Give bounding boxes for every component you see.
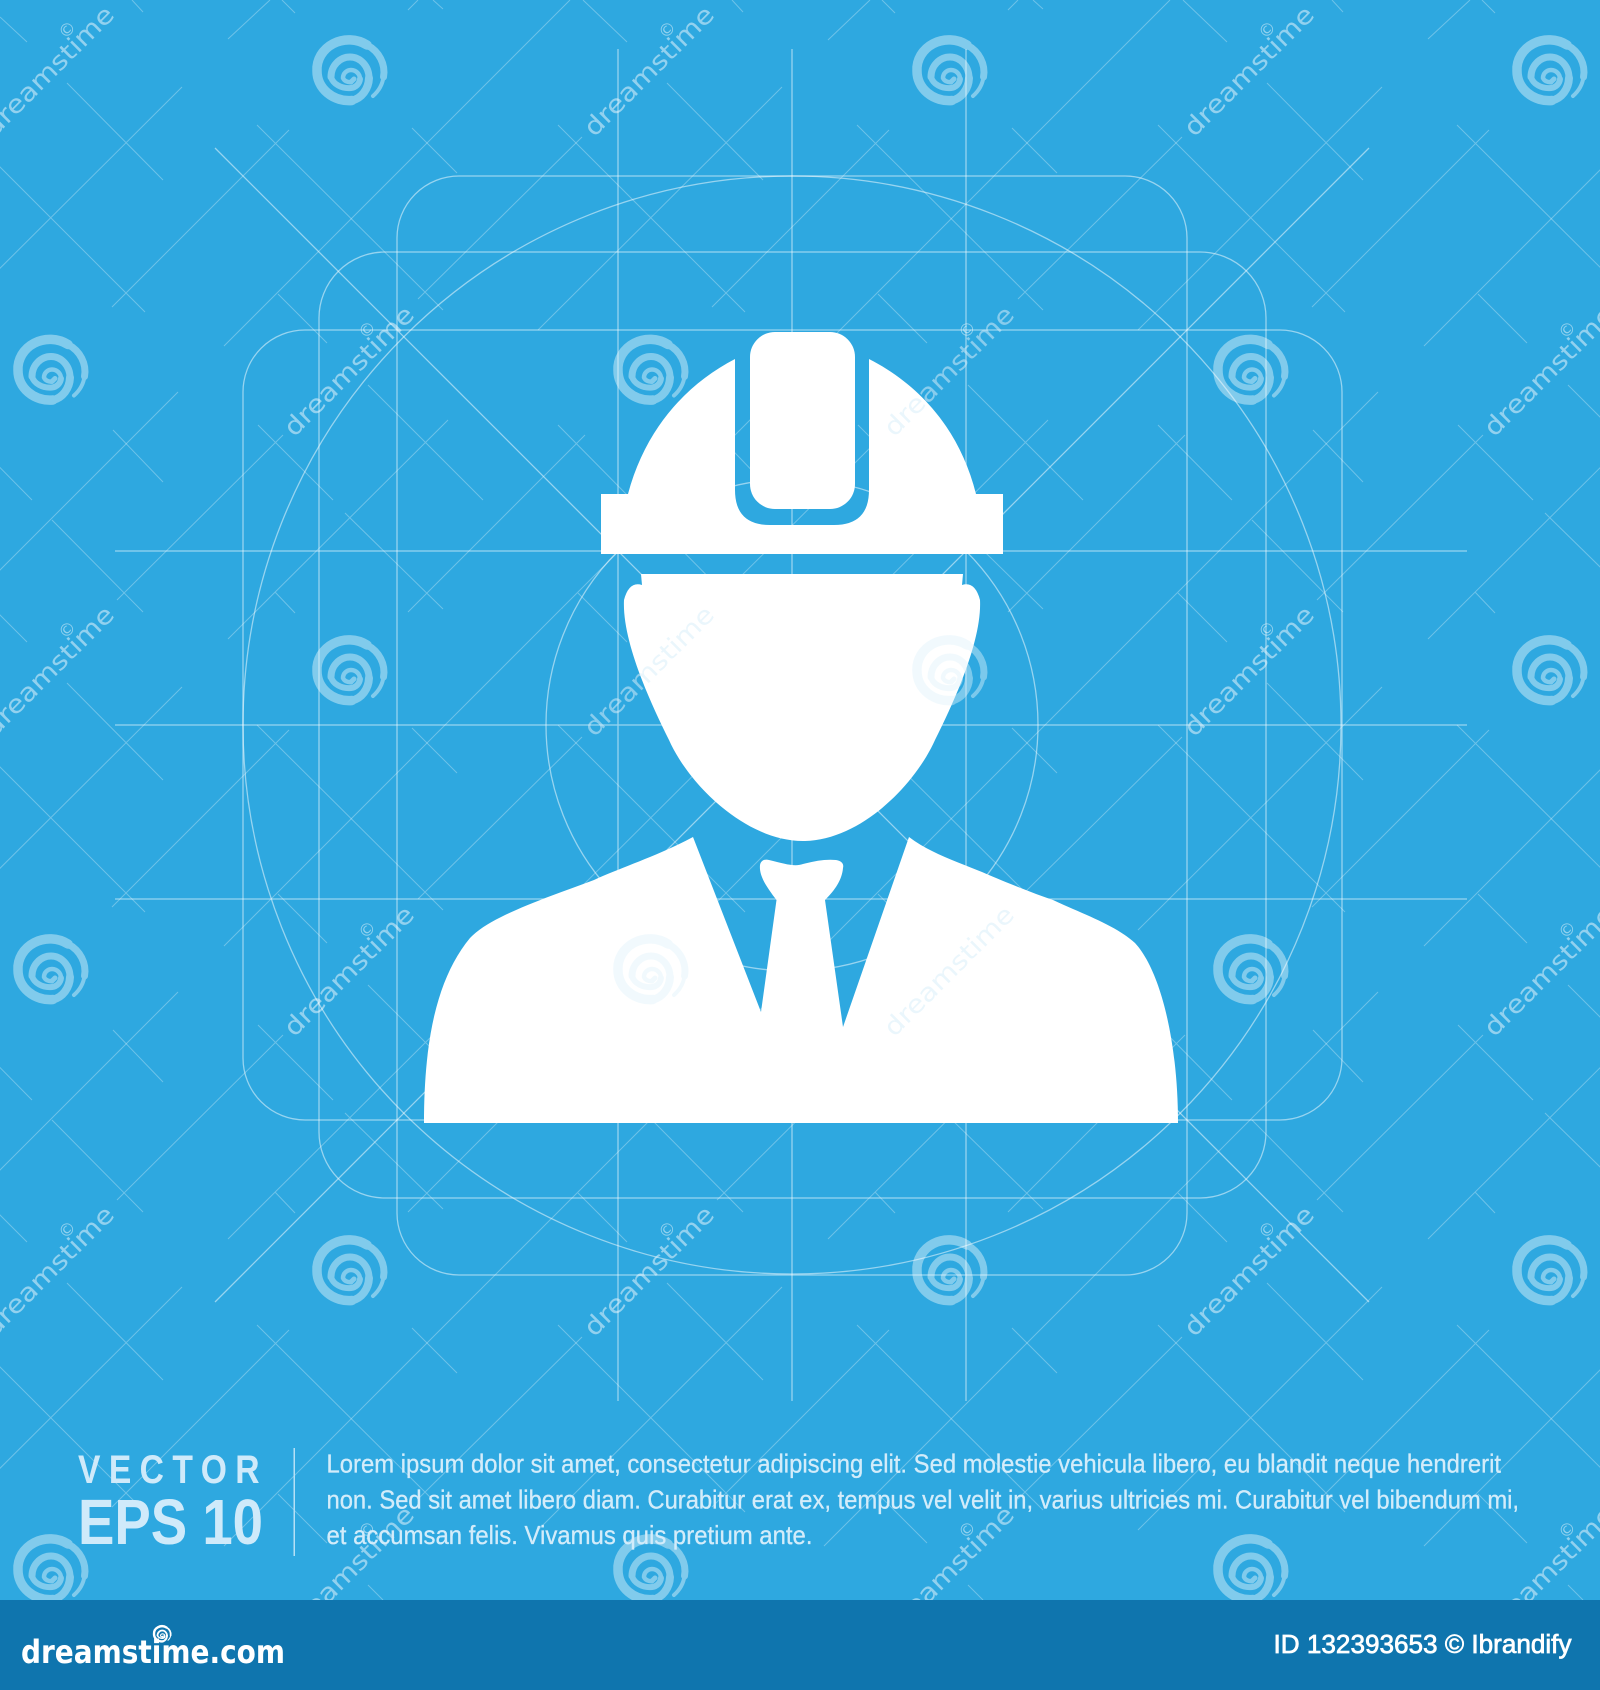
faint watermarks over the icon: dreamstime bbox=[878, 900, 1020, 1042]
description text: et accumsan felis. Vivamus quis pretium ante. bbox=[326, 1520, 812, 1550]
helmet bbox=[601, 359, 1003, 554]
watermark wordmarks: © bbox=[55, 1217, 81, 1243]
image id and credit: ID 132393653 © Ibrandify bbox=[1274, 1631, 1572, 1659]
badge: vector eps 10 bbox=[78, 1448, 268, 1558]
watermark wordmarks: © bbox=[1255, 1217, 1281, 1243]
watermark wordmarks: © bbox=[1555, 317, 1581, 343]
watermark wordmarks: dreamstime bbox=[578, 0, 720, 142]
watermark wordmarks: © bbox=[1555, 1517, 1581, 1543]
watermark wordmarks: © bbox=[955, 917, 981, 943]
watermark wordmarks: © bbox=[355, 1517, 381, 1543]
watermark wordmarks: © bbox=[1255, 617, 1281, 643]
badge: vector eps 10: EPS 10 bbox=[78, 1486, 263, 1558]
icon: engineer with hard hat bbox=[424, 332, 1178, 1123]
faint watermarks over the icon: dreamstime bbox=[878, 300, 1020, 442]
watermark wordmarks: dreamstime bbox=[578, 600, 720, 742]
description text: Lorem ipsum dolor sit amet, consectetur adipiscing elit. Sed molestie vehicula libero, eu blandit neque hendrerit bbox=[326, 1448, 1502, 1478]
watermark wordmarks: © bbox=[55, 617, 81, 643]
watermark wordmarks: © bbox=[955, 1517, 981, 1543]
watermark wordmarks: dreamstime bbox=[278, 1500, 420, 1642]
watermark wordmarks: © bbox=[655, 1217, 681, 1243]
watermark wordmarks: dreamstime bbox=[278, 900, 420, 1042]
watermark wordmarks: © bbox=[955, 317, 981, 343]
watermark wordmarks: dreamstime bbox=[278, 300, 420, 442]
watermark wordmarks: dreamstime bbox=[1178, 0, 1320, 142]
watermark wordmarks: © bbox=[55, 17, 81, 43]
watermark wordmarks: © bbox=[355, 917, 381, 943]
suit and tie bbox=[424, 837, 1178, 1123]
divider bbox=[294, 1448, 295, 1556]
face bbox=[624, 574, 980, 841]
watermark wordmarks: dreamstime bbox=[878, 300, 1020, 442]
faint watermarks over the icon bbox=[578, 300, 1020, 1042]
footer bar bbox=[0, 1600, 1600, 1690]
helmet lamp bbox=[750, 332, 855, 509]
watermark wordmarks: dreamstime bbox=[878, 900, 1020, 1042]
watermark wordmarks: © bbox=[655, 617, 681, 643]
faint watermarks over the icon: dreamstime bbox=[578, 600, 720, 742]
watermark wordmarks: dreamstime bbox=[1178, 1200, 1320, 1342]
watermark wordmarks: dreamstime bbox=[1178, 600, 1320, 742]
watermark wordmarks: © bbox=[655, 17, 681, 43]
watermark wordmarks: dreamstime bbox=[878, 1500, 1020, 1642]
watermark wordmarks: dreamstime bbox=[578, 1200, 720, 1342]
watermark wordmarks: © bbox=[1255, 17, 1281, 43]
watermark wordmarks: © bbox=[1555, 917, 1581, 943]
description text bbox=[326, 1448, 1519, 1550]
icon construction grid bbox=[115, 49, 1467, 1401]
footer logo: dreamstime.com bbox=[21, 1633, 285, 1671]
badge: vector eps 10: VECTOR bbox=[78, 1448, 268, 1492]
watermark wordmarks: © bbox=[355, 317, 381, 343]
description text: non. Sed sit amet libero diam. Curabitur erat ex, tempus vel velit in, varius ultricies mi. Curabitur vel bibendum mi, bbox=[326, 1484, 1519, 1514]
